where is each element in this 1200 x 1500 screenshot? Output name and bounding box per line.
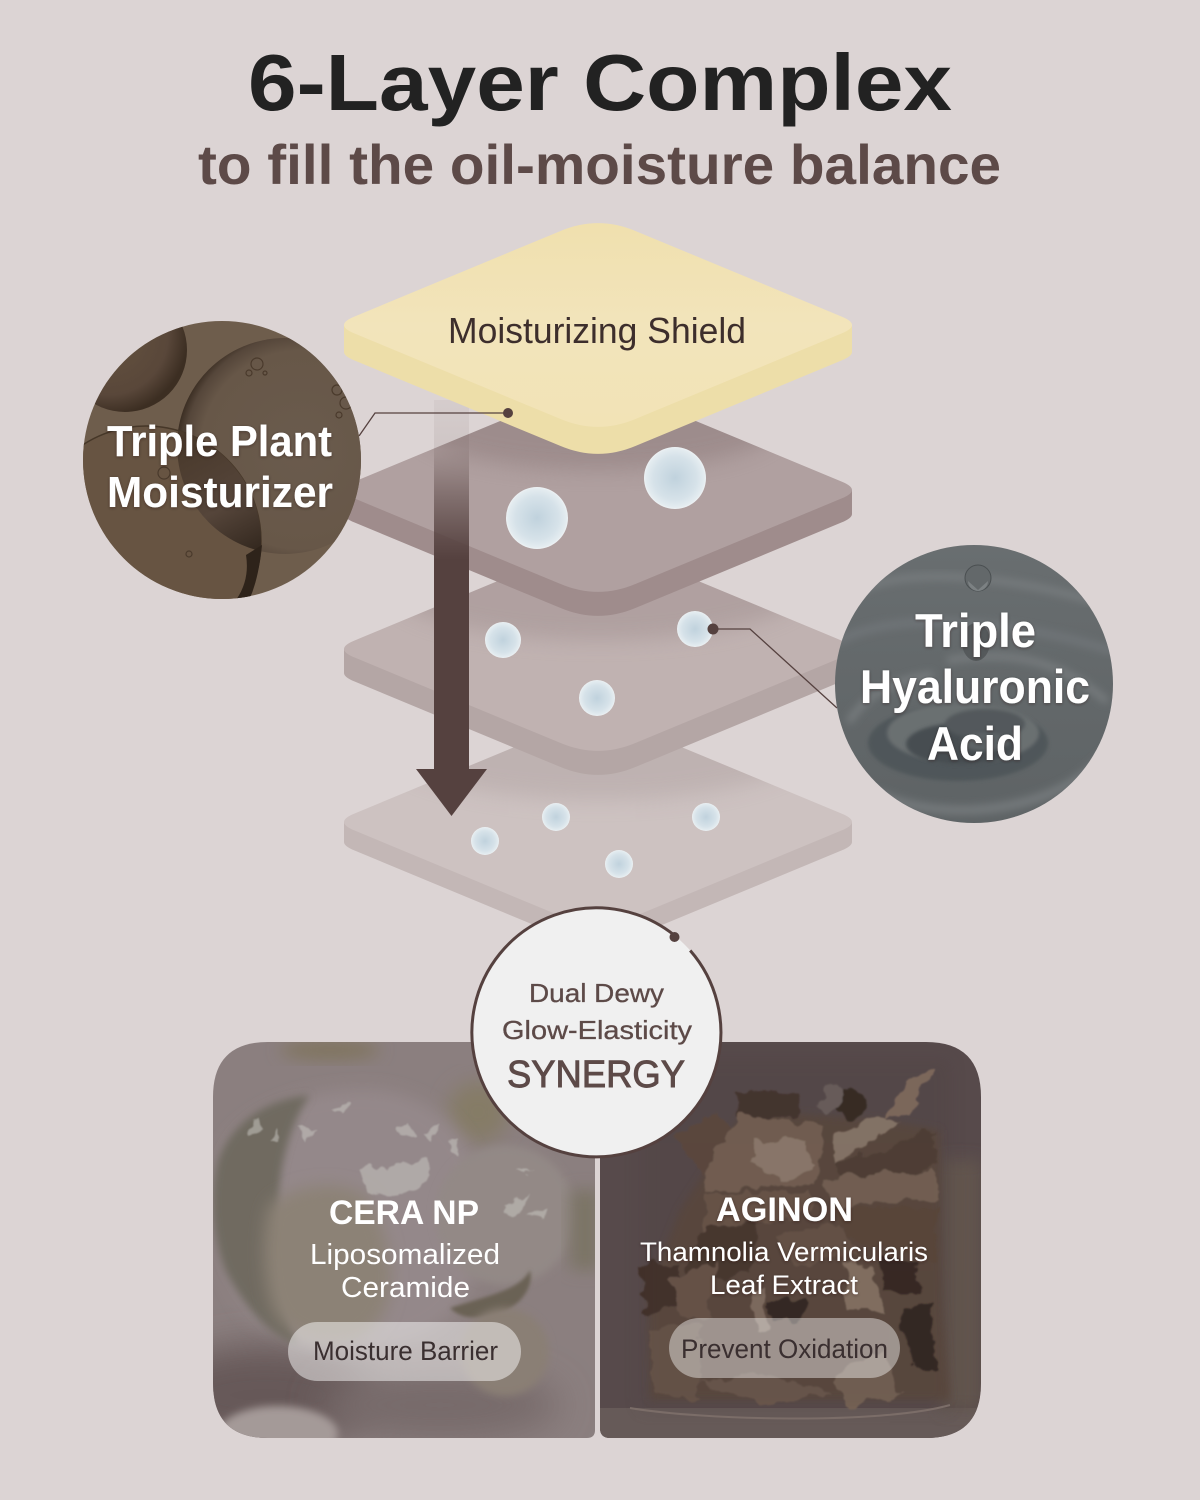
label: triple hyaluronic acid: Hyaluronic [860,660,1090,713]
label: moisturizing shield: Moisturizing Shield [448,310,746,351]
arrow: downward gradient arrow [416,400,487,816]
label: cera np [310,1194,500,1304]
title: 6-Layer Complex [248,38,952,127]
circle: triple plant moisturizer [83,321,361,599]
label: aginon: Leaf Extract [710,1270,859,1300]
label: dual dewy glow-elasticity [502,978,692,1045]
label: triple hyaluronic acid [860,604,1090,770]
label: triple plant moisturizer [107,417,333,517]
layer 2: darkest plate with large bubbles [348,421,852,616]
pill: prevent oxidation [669,1318,900,1378]
label: aginon [640,1191,928,1300]
label: dual dewy glow-elasticity: Dual Dewy [529,978,664,1008]
label: triple hyaluronic acid: Acid [927,717,1023,770]
label: aginon: Thamnolia Vermicularis [640,1237,928,1267]
label: aginon: AGINON [716,1191,853,1229]
label: synergy: SYNERGY [507,1054,685,1096]
circle: synergy badge [472,908,722,1158]
label: triple hyaluronic acid: Triple [915,604,1036,657]
label: cera np: Liposomalized [310,1239,500,1271]
subtitle: to fill the oil-moisture balance [198,133,1001,196]
pill: moisture barrier [288,1322,521,1381]
layer 1: moisturizing shield plate [344,223,852,454]
label: cera np: Ceramide [341,1272,470,1304]
layer 3: mid plate with bubbles [344,582,842,775]
callout: plant moisturizer leader line [359,408,513,436]
callout: hyaluronic acid leader line [708,624,837,708]
layer 4: palest plate with bubbles [344,748,852,925]
label: cera np: CERA NP [329,1194,479,1232]
card: cera np [213,1042,595,1438]
pill: prevent oxidation: Prevent Oxidation [681,1334,888,1364]
card: aginon [600,1042,981,1438]
label: triple plant moisturizer: Moisturizer [107,468,333,517]
pill: moisture barrier: Moisture Barrier [313,1336,498,1366]
label: triple plant moisturizer: Triple Plant [107,417,332,466]
circle: triple hyaluronic acid [835,545,1113,823]
label: dual dewy glow-elasticity: Glow-Elasticity [502,1015,692,1045]
